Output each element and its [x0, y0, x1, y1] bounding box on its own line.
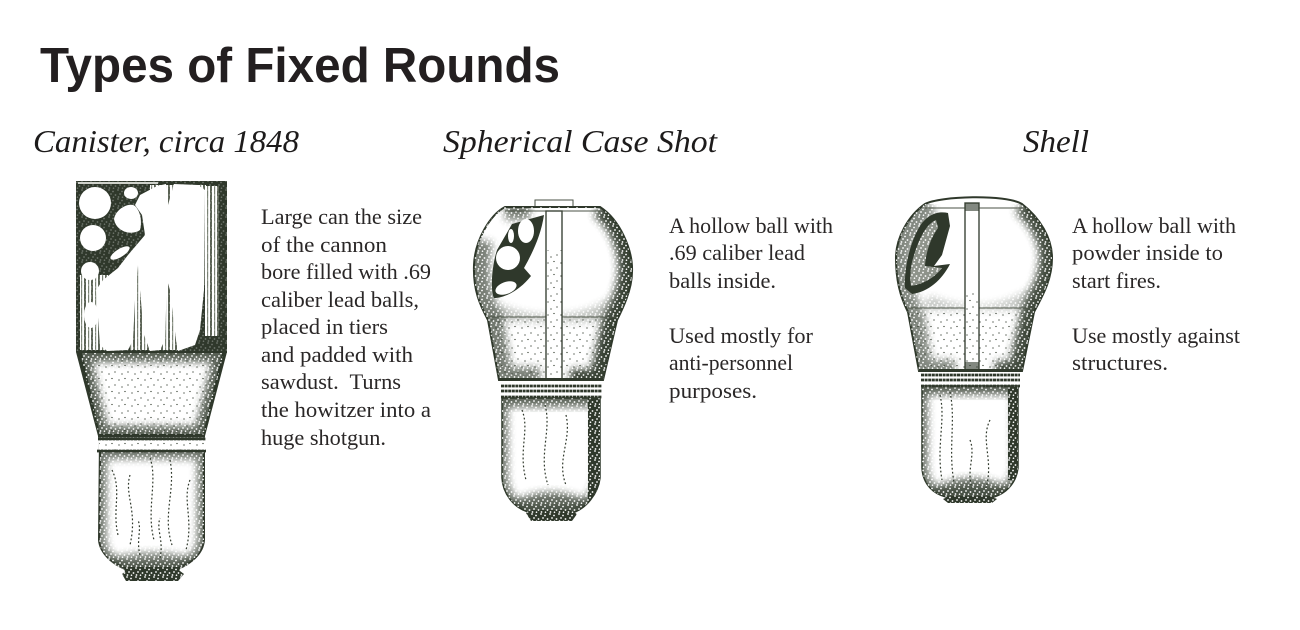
panel: canister: [33, 123, 431, 581]
text: shell description: powder inside to: [1072, 240, 1223, 265]
text: shell description: A hollow ball with: [1072, 213, 1236, 238]
heading: shell: Shell: [1023, 123, 1089, 159]
text: spherical case shot description: Used mostly for: [669, 323, 814, 348]
text: canister description: bore filled with .69: [261, 259, 431, 284]
illustration: canister round: [76, 181, 228, 581]
text: spherical case shot description: balls inside.: [669, 268, 776, 293]
text: spherical case shot description: [669, 213, 833, 403]
text: canister description: and padded with: [261, 342, 413, 367]
text: canister description: the howitzer into a: [261, 397, 431, 422]
text: canister description: of the cannon: [261, 232, 387, 257]
text: spherical case shot description: purposes.: [669, 378, 757, 403]
illustration: spherical case shot round: [470, 200, 640, 521]
canister cylinder with lead balls: [76, 181, 227, 352]
shell body: [470, 200, 640, 385]
cone section: [76, 352, 228, 437]
cut-away window, powder chamber: [905, 212, 950, 294]
text: shell description: [1072, 213, 1240, 375]
heading: spherical case shot: Spherical Case Shot: [443, 123, 718, 159]
cloth bag with ties: [915, 375, 1025, 503]
text: canister description: sawdust. Turns: [261, 369, 401, 394]
text: shell description: structures.: [1072, 350, 1168, 375]
text: spherical case shot description: anti-personnel: [669, 350, 793, 375]
text: shell description: Use mostly against: [1072, 323, 1240, 348]
text: canister description: placed in tiers: [261, 314, 388, 339]
title: Types of Fixed Rounds: [40, 39, 560, 93]
cloth bag with ties: [95, 438, 210, 581]
text: canister description: Large can the size: [261, 204, 422, 229]
text: canister description: huge shotgun.: [261, 425, 386, 450]
heading: canister: Canister, circa 1848: [33, 123, 299, 159]
text: spherical case shot description: .69 caliber lead: [669, 240, 805, 265]
panel: spherical case shot: [443, 123, 833, 521]
text: spherical case shot description: A hollow ball with: [669, 213, 833, 238]
illustration: shell round: [890, 195, 1060, 503]
text: shell description: start fires.: [1072, 268, 1161, 293]
text: canister description: [261, 204, 431, 450]
panel: shell: [890, 123, 1240, 503]
text: canister description: caliber lead balls,: [261, 287, 419, 312]
cut-away window with lead balls: [492, 215, 544, 298]
shell body: [895, 196, 1053, 372]
cloth bag with ties: [495, 386, 605, 521]
